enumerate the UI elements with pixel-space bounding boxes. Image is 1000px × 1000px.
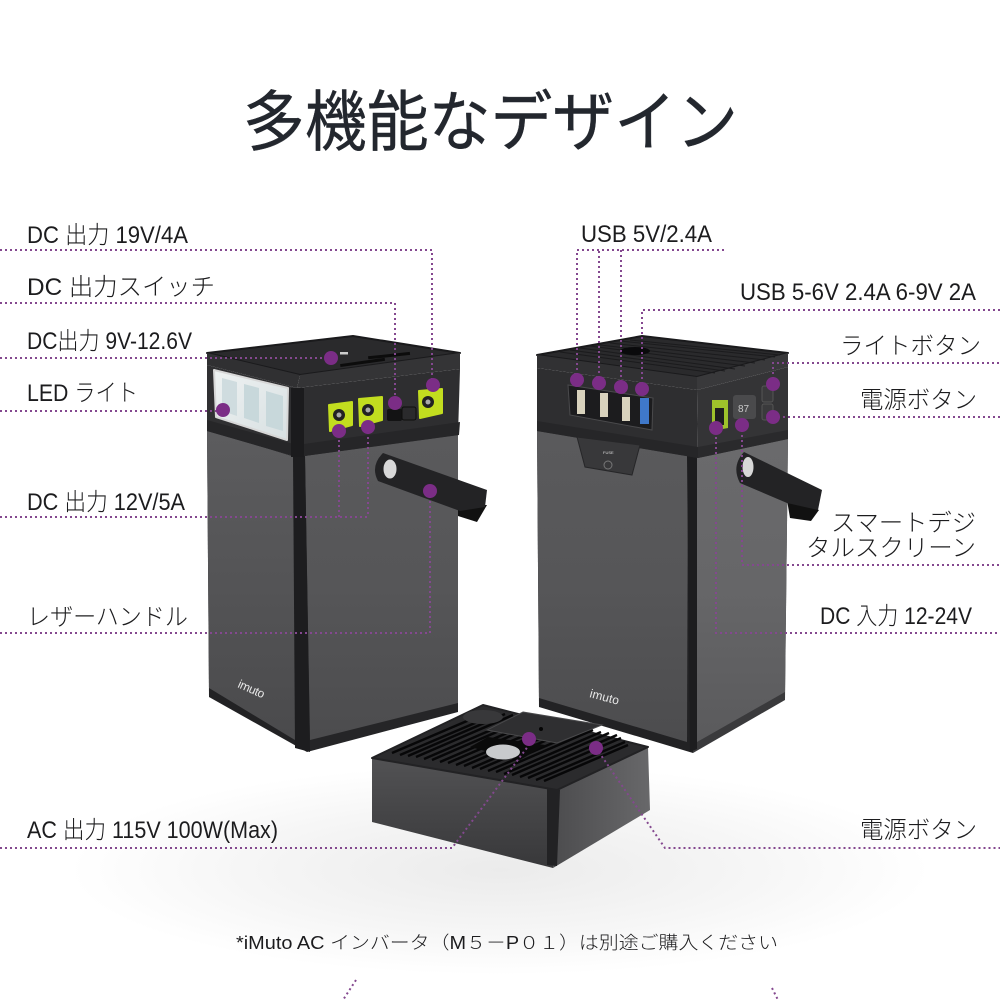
lid with vent lines (537, 336, 788, 390)
label: smart digital screen: スマートデジ (831, 510, 976, 537)
imuto logo: imuto (588, 686, 621, 708)
label: light button: ライトボタン (840, 333, 981, 360)
label: DC output 12V/5A: DC 出力 12V/5A (27, 489, 185, 516)
AC inverter module (372, 705, 650, 868)
leather handle (375, 453, 487, 522)
USB ports (568, 385, 653, 430)
digital screen (733, 395, 756, 419)
label: leather handle: レザーハンドル (27, 604, 188, 631)
upper section (537, 367, 788, 458)
upper section (207, 365, 460, 457)
lid (207, 336, 460, 388)
USB port 3 (622, 397, 630, 421)
DC input port (712, 400, 728, 431)
USB port 2 (600, 393, 608, 417)
green DC port 1 (329, 402, 352, 431)
imuto logo: imuto (236, 677, 267, 701)
leather handle (736, 452, 822, 521)
label: USB 5-6V: USB 5-6V 2.4A 6-9V 2A (740, 279, 976, 306)
body (537, 430, 788, 753)
power bank: right unit (537, 336, 822, 753)
inverter body (372, 747, 650, 868)
green DC port 3 (419, 389, 442, 418)
label: DC output 19V/4A: DC 出力 19V/4A (27, 222, 188, 249)
fuse cover: FUSE (603, 450, 614, 455)
label: DC output 9V-12.6V: DC出力 9V-12.6V (27, 328, 192, 355)
green DC port 2 (359, 397, 382, 426)
round recess (463, 710, 503, 724)
rotary knob (470, 737, 545, 760)
label: DC input: DC 入力 12-24V (820, 603, 972, 630)
LED light (214, 370, 288, 440)
light and power buttons (762, 386, 773, 420)
power bank: left unit (207, 336, 487, 752)
label: inverter power button: 電源ボタン (860, 817, 977, 844)
label: smart digital screen (806, 510, 976, 562)
label: power button: 電源ボタン (860, 387, 977, 414)
AC socket (487, 712, 602, 743)
digital screen: 87 (738, 404, 750, 415)
DC switch (387, 407, 416, 421)
footnote: *iMuto AC インバータ（M５－P０１）は別途ご購入ください (236, 933, 778, 953)
label: AC output: AC 出力 115V 100W(Max) (27, 817, 278, 844)
label: USB 5V/2.4A: USB 5V/2.4A (581, 221, 712, 248)
label: DC output switch: DC 出力スイッチ (27, 274, 215, 301)
label: smart digital screen: タルスクリーン (806, 535, 976, 562)
USB port 4 quick charge (640, 398, 649, 424)
body (207, 430, 458, 752)
leader lines (0, 250, 1000, 1000)
floor shadow (70, 765, 930, 975)
title: 多機能なデザイン (243, 85, 738, 159)
labels: right (581, 221, 981, 844)
labels: left (27, 222, 278, 844)
USB port 1 (577, 390, 585, 414)
label: LED light: LED ライト (27, 380, 138, 407)
callout dots (216, 351, 780, 755)
fuse cover (577, 437, 640, 475)
vented top (372, 705, 648, 790)
